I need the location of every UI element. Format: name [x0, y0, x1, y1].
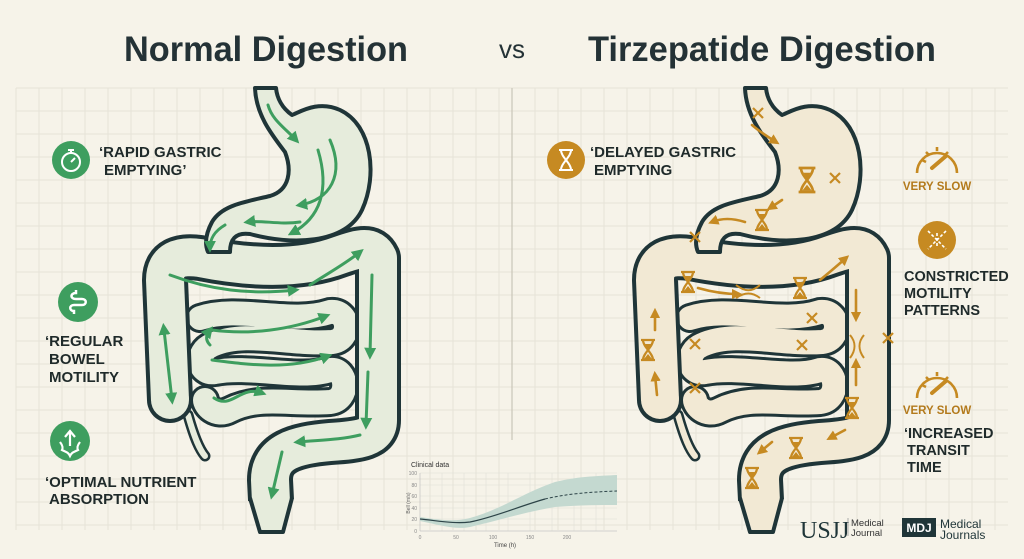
icon: gauge — [917, 147, 957, 173]
icon: gauge — [917, 372, 957, 398]
gold slowed arrows — [655, 125, 856, 452]
chart: clinical data: 0 — [414, 529, 417, 535]
x marks — [690, 108, 893, 393]
label: regular bowel motility: ‘REGULAR — [45, 333, 124, 350]
logo: MDJ medical journals: Medical — [940, 517, 981, 531]
chart: clinical data: 40 — [411, 506, 417, 512]
chart: clinical data: 50 — [453, 535, 459, 541]
title: tirzepatide: Tirzepatide Digestion — [588, 30, 936, 69]
logo: USJJ medical journal: USJJ — [800, 518, 849, 544]
logo: MDJ medical journals: Journals — [940, 528, 985, 542]
label: constricted motility patterns: MOTILITY — [904, 286, 972, 302]
logo: USJJ medical journal — [800, 518, 884, 544]
chart: clinical data — [406, 462, 617, 549]
chart: clinical data: 80 — [411, 483, 417, 489]
label: delayed gastric emptying: EMPTYING — [594, 162, 672, 179]
label: constricted motility patterns: PATTERNS — [904, 303, 980, 319]
chart: clinical data: 20 — [411, 517, 417, 523]
illustration: tirzepatide digestive tract — [637, 88, 893, 532]
icon: stopwatch — [52, 141, 90, 179]
chart: clinical data: 200 — [563, 535, 571, 541]
icon: constriction — [918, 221, 956, 259]
chart: clinical data: Bell (m/s) — [406, 492, 412, 514]
label: optimal nutrient absorption — [45, 421, 196, 508]
chart: clinical data: 60 — [411, 494, 417, 500]
logo: MDJ medical journals: MDJ — [906, 521, 932, 535]
label: increased transit time: ‘INCREASED — [904, 426, 993, 442]
chart: clinical data: 150 — [526, 535, 534, 541]
label: regular bowel motility: MOTILITY — [49, 369, 119, 386]
chart: clinical data: 0 — [419, 535, 422, 541]
label: regular bowel motility — [45, 282, 124, 386]
logo: USJJ medical journal: Journal — [851, 528, 882, 539]
label: very slow gauge 2: VERY SLOW — [903, 405, 971, 417]
title: vs: vs — [499, 34, 525, 64]
icon: absorption — [50, 421, 90, 461]
constriction marks — [736, 285, 864, 358]
label: very slow gauge 1 — [903, 147, 971, 193]
label: increased transit time: TRANSIT — [907, 443, 970, 459]
label: rapid gastric emptying: EMPTYING’ — [104, 162, 187, 179]
chart: clinical data: Time (h) — [494, 543, 516, 549]
green flow arrows — [164, 105, 372, 495]
chart: clinical data: 100 — [489, 535, 497, 541]
label: constricted motility patterns: CONSTRICTED — [904, 269, 1009, 285]
chart: clinical data: 100 — [409, 471, 417, 477]
icon: hourglass circle — [547, 141, 585, 179]
logo: MDJ medical journals — [902, 517, 985, 542]
label: delayed gastric emptying: ‘DELAYED GASTRIC — [590, 144, 736, 161]
logo: USJJ medical journal: Medical — [851, 518, 884, 529]
label: very slow gauge 2 — [903, 372, 971, 417]
label: very slow gauge 1: VERY SLOW — [903, 181, 971, 193]
label: rapid gastric emptying — [52, 141, 222, 179]
chart: clinical data: Clinical data — [411, 462, 449, 469]
hourglass icons — [641, 168, 859, 488]
label: rapid gastric emptying: ‘RAPID GASTRIC — [99, 144, 222, 161]
label: delayed gastric emptying — [547, 141, 736, 179]
label: increased transit time: TIME — [907, 460, 942, 476]
title: normal: Normal Digestion — [124, 30, 408, 69]
label: regular bowel motility: BOWEL — [49, 351, 105, 368]
label: optimal nutrient absorption: ‘OPTIMAL NUTRIENT — [45, 474, 196, 491]
label: optimal nutrient absorption: ABSORPTION — [49, 491, 149, 508]
illustration: normal digestive tract — [147, 88, 378, 532]
icon: intestine — [58, 282, 98, 322]
label: constricted motility patterns — [904, 221, 1009, 319]
background grid — [16, 88, 1008, 530]
